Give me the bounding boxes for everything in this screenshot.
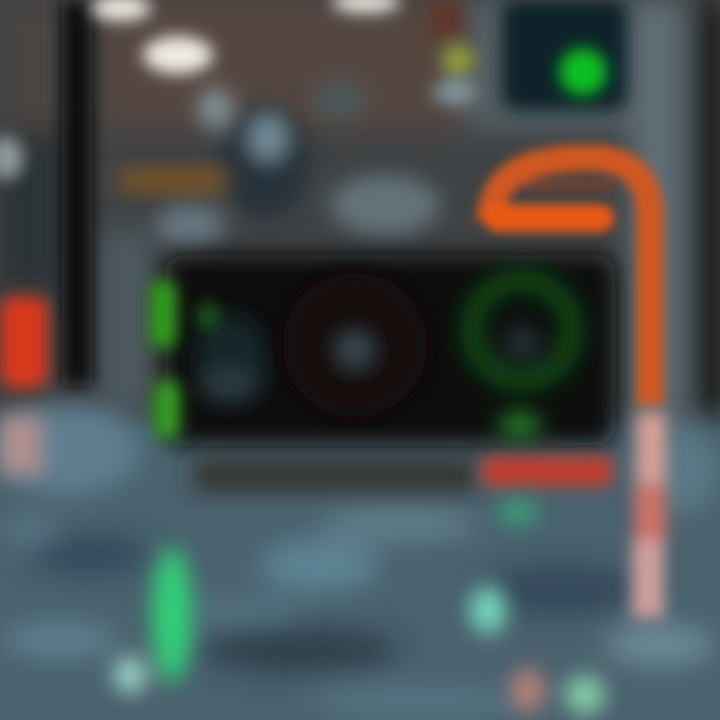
red block at left: [0, 296, 48, 388]
fan: left: [196, 314, 268, 406]
dark vertical post: [62, 0, 92, 385]
pipe reflection on floor: [632, 412, 666, 618]
cables and haze above card: [155, 82, 440, 247]
green reflections: [114, 412, 605, 715]
pale red reflection at left: [0, 415, 42, 475]
floor: [0, 405, 720, 716]
green side lights: [150, 280, 218, 438]
multicolour connector: [430, 0, 477, 105]
orange pipe: [490, 158, 650, 405]
card lower shelf: [195, 458, 475, 492]
fan: centre: [290, 280, 420, 409]
fan: right with green ring: [472, 280, 572, 380]
top right signal box: [502, 0, 627, 110]
green light: [559, 48, 607, 96]
ceiling lights: [0, 0, 400, 180]
graphics card body: [150, 255, 615, 492]
brown bracket: [118, 168, 228, 192]
background wall: [0, 0, 720, 420]
red reflection band: [482, 456, 612, 486]
